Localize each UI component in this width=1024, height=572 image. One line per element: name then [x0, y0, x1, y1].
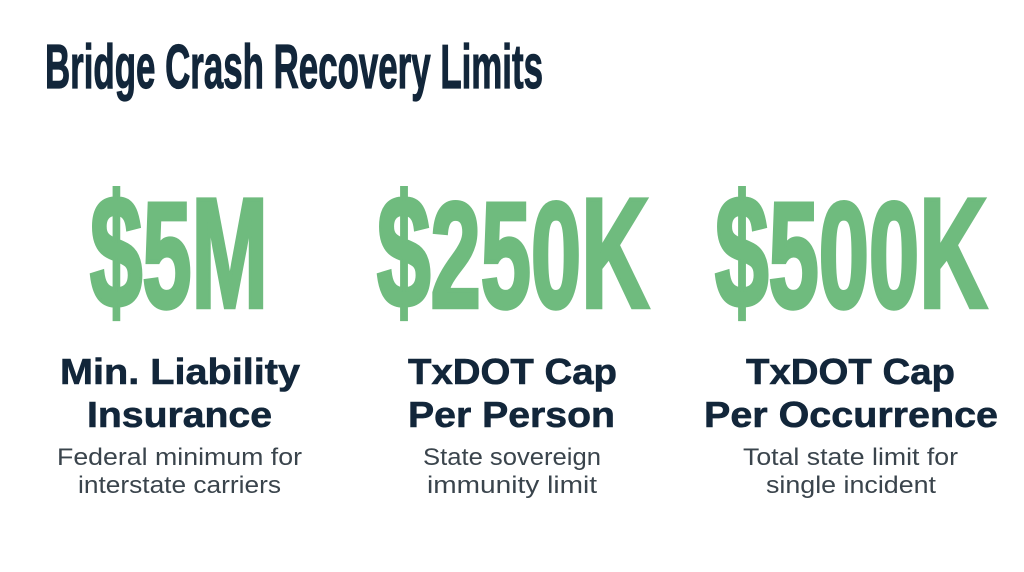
description: federal minimum: [57, 444, 302, 499]
heading: TxDOT Cap Per Person: TxDOT Cap: [408, 351, 617, 392]
description: total state limit: Total state limit for: [743, 444, 958, 471]
description: sovereign immunity: [423, 444, 601, 499]
heading: Min. Liability Insurance: Min. Liability: [60, 351, 300, 392]
description: total state limit: single incident: [766, 472, 936, 499]
description: total state limit: [743, 444, 958, 499]
description: federal minimum: interstate carriers: [78, 472, 281, 499]
heading: TxDOT Cap Per Person: [408, 351, 617, 435]
panel: TxDOT cap per person: [377, 162, 649, 499]
heading: TxDOT Cap Per Occurrence: Per Occurrence: [704, 394, 998, 435]
heading: Min. Liability Insurance: [60, 351, 300, 435]
big number: $250K: $250K: [377, 162, 649, 341]
description: federal minimum: Federal minimum for: [57, 444, 302, 471]
description: sovereign immunity: State sovereign: [423, 444, 601, 471]
panel: TxDOT cap per occurrence: [704, 162, 998, 499]
title: Bridge Crash Recovery Limits: [45, 33, 543, 102]
heading: TxDOT Cap Per Occurrence: [704, 351, 998, 435]
heading: Min. Liability Insurance: Insurance: [87, 394, 272, 435]
heading: TxDOT Cap Per Occurrence: TxDOT Cap: [746, 351, 955, 392]
big number: $500K: $500K: [715, 162, 987, 341]
heading: TxDOT Cap Per Person: Per Person: [408, 394, 615, 435]
big number: $5M: $5M: [90, 162, 268, 341]
description: sovereign immunity: immunity limit: [427, 472, 597, 499]
panel: minimum liability insurance: [57, 162, 302, 499]
